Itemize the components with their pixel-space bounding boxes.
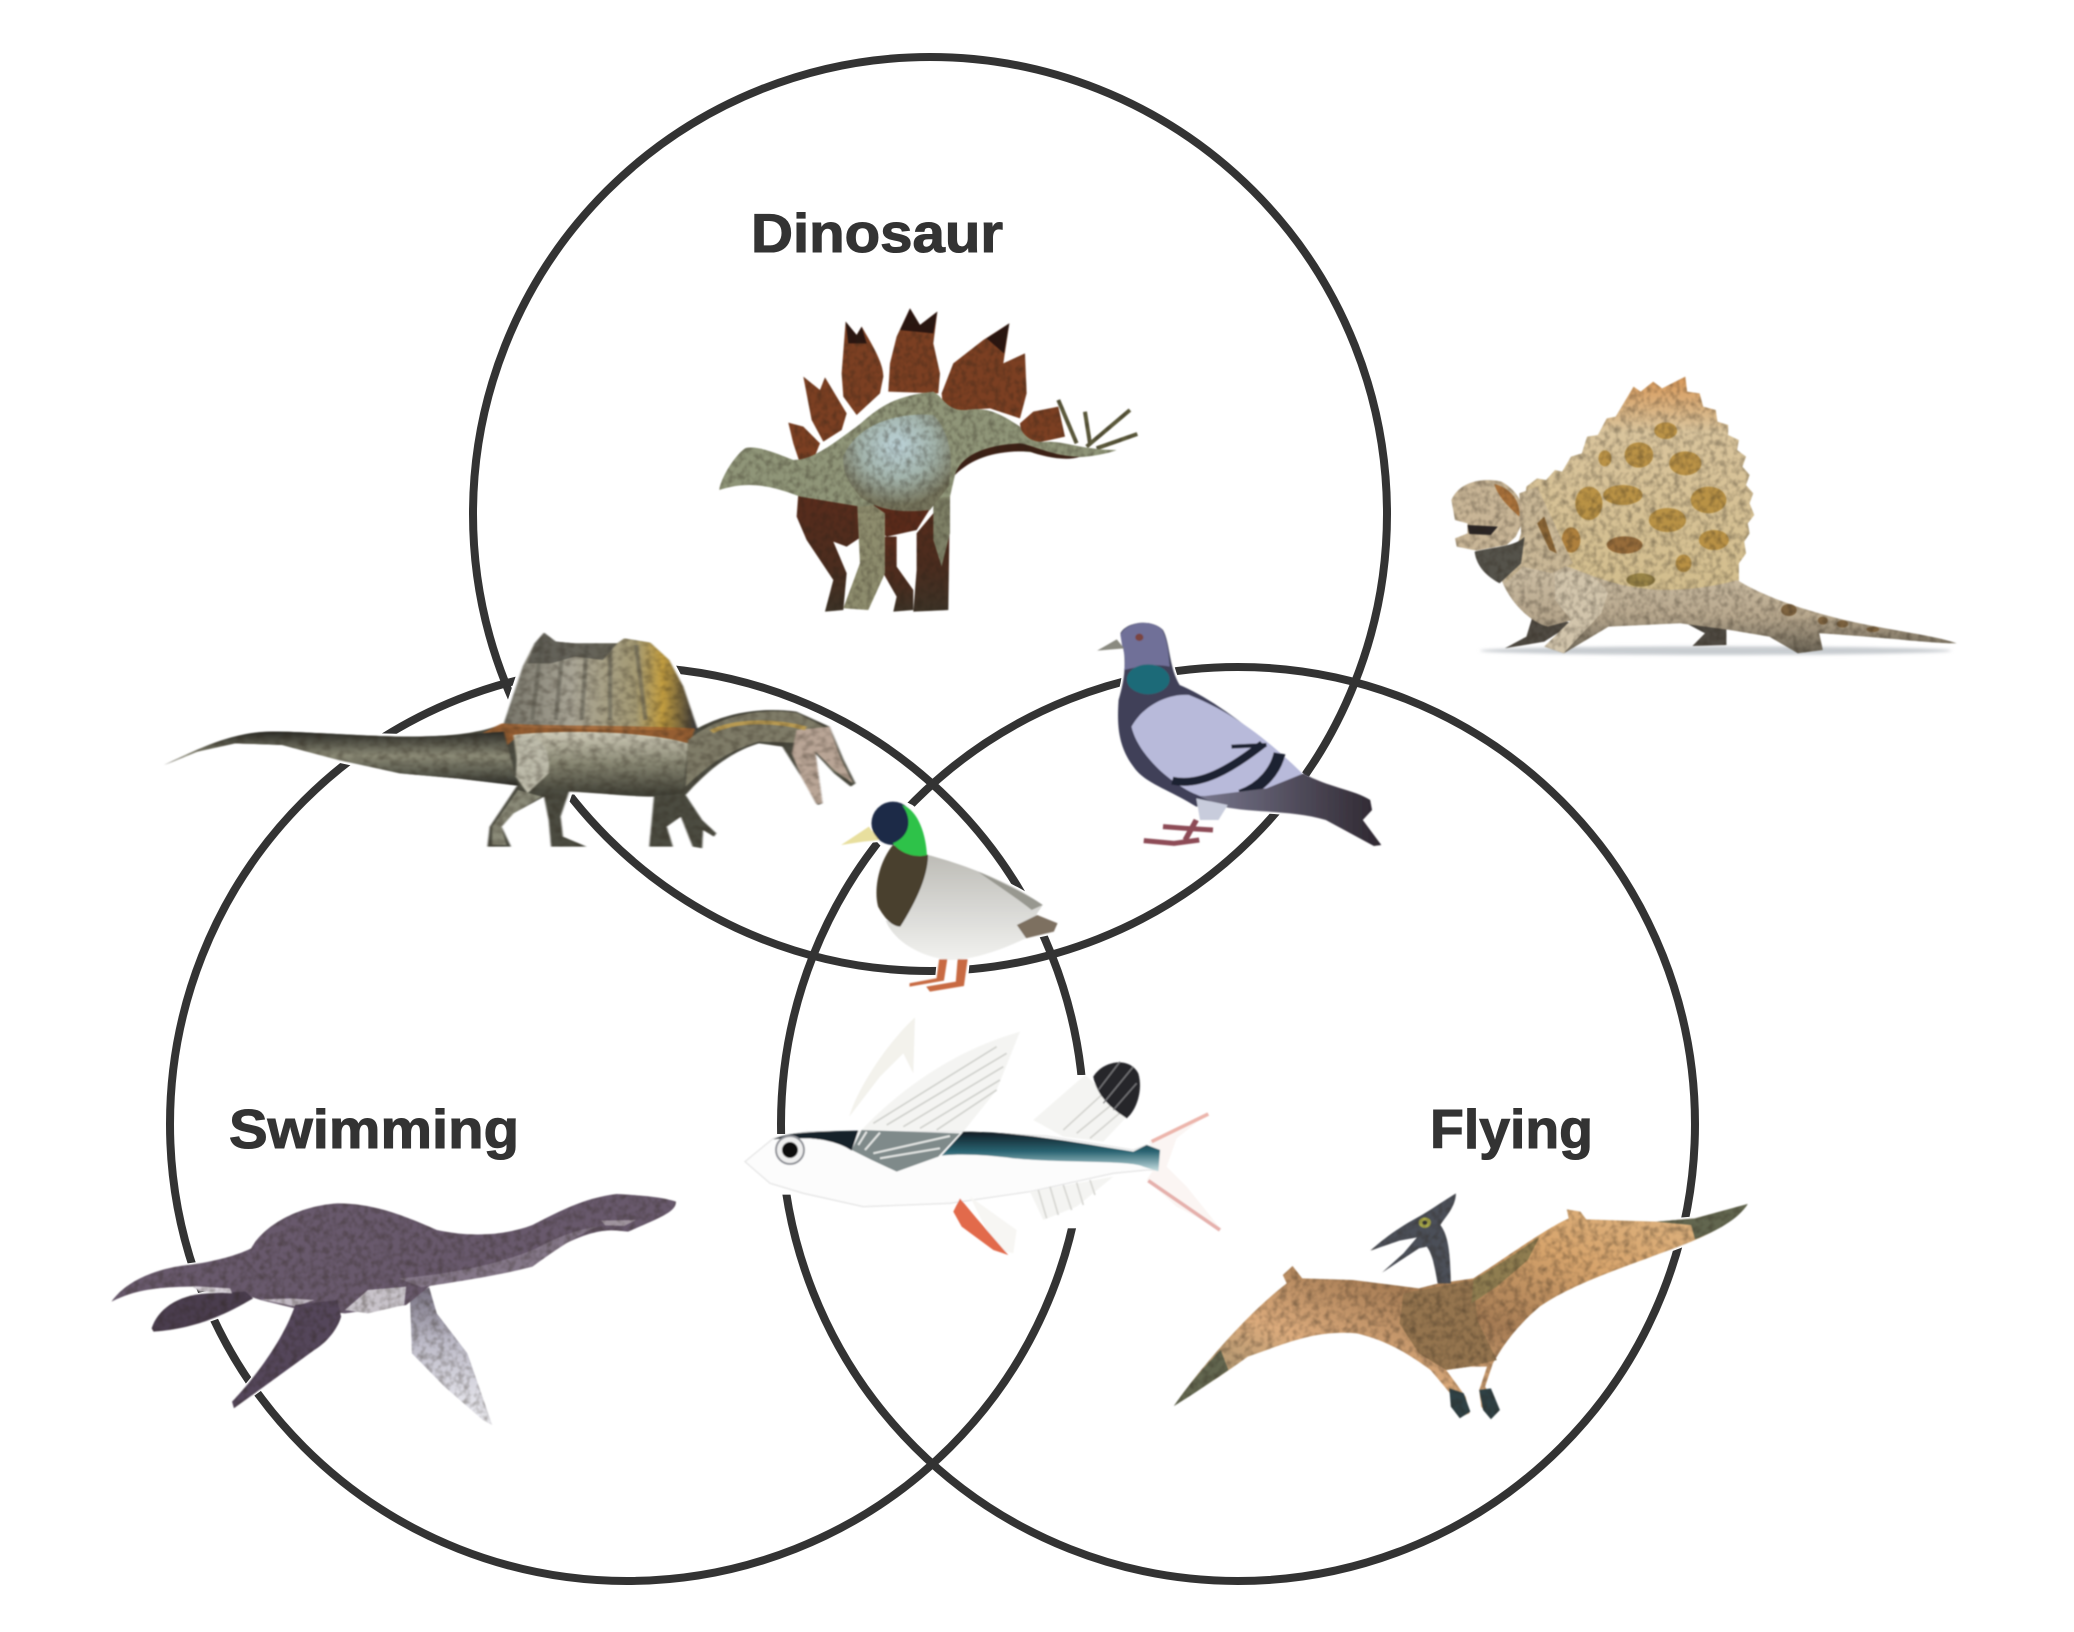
stegosaurus tail underside bbox=[955, 443, 1080, 475]
duck tail bbox=[1017, 915, 1058, 938]
duck bill bbox=[841, 827, 879, 845]
pigeon neck sheen bbox=[1127, 664, 1170, 694]
dimetrodon fore leg far bbox=[1505, 613, 1573, 648]
dimetrodon sail bbox=[1523, 377, 1754, 597]
pigeon beak bbox=[1097, 639, 1124, 651]
fish anal fin bbox=[1030, 1177, 1113, 1220]
spinosaurus sail streaks bbox=[532, 640, 645, 720]
plesiosaur halo bbox=[111, 1194, 676, 1425]
fish body bbox=[745, 1132, 1160, 1207]
heading: Flying: Flying bbox=[1430, 1098, 1593, 1160]
spinosaurus neck and head bbox=[686, 711, 853, 787]
spinosaurus halo bbox=[164, 633, 855, 848]
pigeon tail bbox=[1200, 773, 1381, 846]
fish back bbox=[942, 1132, 1160, 1171]
circle: Swimming bbox=[170, 667, 1084, 1581]
plesiosaur belly bbox=[345, 1287, 406, 1313]
duck head bbox=[871, 802, 914, 845]
stegosaurus body bbox=[719, 392, 1117, 507]
duck green neck bbox=[893, 805, 927, 856]
pteranodon head and neck bbox=[1370, 1193, 1456, 1283]
pteranodon wing tip left bbox=[1174, 1350, 1228, 1406]
fish small dorsal fin bbox=[849, 1017, 915, 1117]
pigeon head bbox=[1120, 623, 1170, 670]
fish rear dorsal fin bbox=[1033, 1075, 1130, 1142]
dimetrodon neck bbox=[1505, 487, 1573, 583]
fish ventral fin bbox=[970, 1197, 1017, 1253]
pteranodon wing arm bbox=[1471, 1237, 1540, 1303]
fish tail bbox=[1147, 1113, 1222, 1230]
fish large pectoral fin bbox=[862, 1032, 1020, 1132]
heading: Swimming: Swimming bbox=[229, 1098, 519, 1160]
dimetrodon head bbox=[1451, 480, 1523, 551]
animal: mallard duck bbox=[841, 802, 1058, 992]
fish eye bbox=[776, 1136, 804, 1164]
pteranodon torso bbox=[1400, 1280, 1497, 1370]
dimetrodon body and tail bbox=[1501, 547, 1957, 653]
spinosaurus sail bbox=[504, 633, 697, 730]
pigeon silhouette bbox=[1118, 623, 1304, 810]
pigeon feet bbox=[1144, 820, 1213, 843]
circle: Flying bbox=[781, 667, 1695, 1581]
pteranodon halo bbox=[1174, 1204, 1748, 1418]
spinosaurus torso bbox=[513, 732, 688, 795]
plesiosaur neck underside bbox=[399, 1227, 598, 1287]
fish fin black spot bbox=[1093, 1062, 1140, 1118]
fish halo bbox=[772, 1075, 1093, 1228]
duck chest bbox=[876, 845, 928, 927]
plesiosaur snout highlight bbox=[601, 1220, 636, 1226]
dimetrodon sail spots bbox=[1562, 422, 1729, 587]
plesiosaur front flipper bbox=[232, 1300, 341, 1408]
pigeon thigh bbox=[1196, 798, 1228, 820]
stegosaurus hump bbox=[843, 414, 951, 511]
animal: dimetrodon bbox=[1451, 377, 1957, 655]
dimetrodon head patch bbox=[1494, 484, 1519, 517]
plesiosaur rear flipper bbox=[152, 1292, 253, 1332]
dimetrodon throat bbox=[1475, 537, 1525, 583]
spinosaurus neck stripe bbox=[712, 722, 806, 732]
stegosaurus far legs bbox=[797, 493, 950, 612]
dimetrodon hind leg far bbox=[1680, 620, 1726, 646]
animal: pigeon bbox=[1097, 623, 1381, 847]
animal: flying fish bbox=[745, 1017, 1222, 1255]
stegosaurus belly bbox=[857, 493, 940, 537]
pteranodon wing tip right bbox=[1656, 1204, 1748, 1239]
stegosaurus plates bbox=[788, 308, 1065, 463]
stegosaurus plate tips bbox=[846, 308, 1009, 353]
dimetrodon tail markings bbox=[1781, 604, 1879, 632]
pigeon eye bbox=[1135, 634, 1143, 641]
spinosaurus rear leg light bbox=[492, 790, 542, 845]
spinosaurus snout bbox=[792, 727, 853, 804]
dimetrodon ground shadow bbox=[1480, 646, 1951, 655]
plesiosaur white rear flipper bbox=[410, 1287, 492, 1425]
spinosaurus silhouette bbox=[164, 633, 855, 848]
duck body bbox=[886, 855, 1043, 960]
Venn circles bbox=[170, 57, 1695, 1581]
plesiosaur tail gap bbox=[192, 1286, 232, 1293]
pigeon halo bbox=[1098, 623, 1381, 847]
pigeon wing bbox=[1132, 695, 1305, 798]
duck legs bbox=[910, 959, 968, 992]
dimetrodon neck marking bbox=[1537, 517, 1557, 553]
fish pectoral base bbox=[852, 1130, 960, 1172]
animal: plesiosaur bbox=[111, 1194, 676, 1425]
animal: spinosaurus bbox=[164, 633, 855, 848]
spinosaurus haunch bbox=[516, 736, 549, 793]
duck halo bbox=[841, 803, 1058, 990]
dimetrodon shoulder bbox=[1544, 571, 1608, 653]
duck wing edge bbox=[978, 872, 1043, 910]
plesiosaur body and neck bbox=[111, 1194, 676, 1313]
animal: stegosaurus bbox=[719, 308, 1137, 612]
stegosaurus tail spikes bbox=[1058, 400, 1137, 448]
animal: pteranodon bbox=[1174, 1193, 1748, 1419]
circle: Dinosaur bbox=[473, 57, 1387, 971]
pteranodon wings and body bbox=[1174, 1204, 1748, 1418]
spinosaurus tail bbox=[164, 732, 518, 786]
spinosaurus sail top bbox=[528, 633, 617, 663]
pteranodon feet bbox=[1449, 1388, 1500, 1419]
pteranodon eye bbox=[1419, 1217, 1431, 1228]
stegosaurus near leg bbox=[843, 493, 885, 610]
spinosaurus sail base bbox=[476, 723, 695, 753]
heading: Dinosaur: Dinosaur bbox=[751, 202, 1003, 264]
plesiosaur lower belly bbox=[261, 1298, 314, 1307]
fish head back bbox=[773, 1131, 858, 1151]
pigeon wing bars bbox=[1172, 744, 1280, 795]
fish fin rays bbox=[873, 1047, 1007, 1130]
dimetrodon mouth bbox=[1467, 525, 1498, 535]
stegosaurus rear leg highlight bbox=[933, 480, 950, 567]
